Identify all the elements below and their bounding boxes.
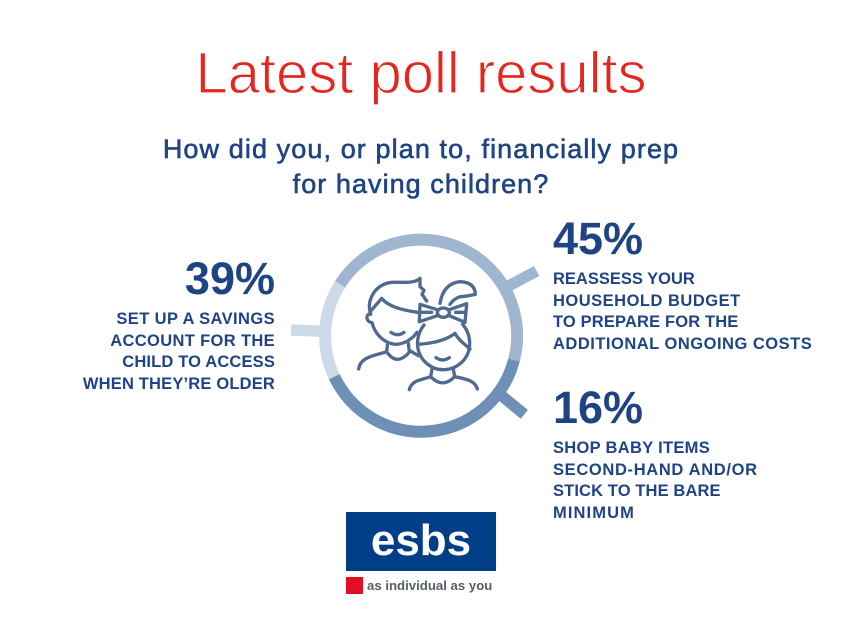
label 39%: SET UP A SAVINGS — [116, 310, 275, 328]
label 16%: STICK TO THE BARE — [553, 482, 721, 500]
label 16% — [553, 439, 758, 522]
ring segment 39% — [291, 284, 340, 377]
question heading: for having children? — [293, 169, 549, 199]
ring chart with children icon — [290, 234, 540, 438]
label 45%: HOUSEHOLD BUDGET — [553, 292, 741, 310]
ring segment 45% — [340, 240, 537, 360]
tagline: as individual as you — [367, 578, 492, 593]
title: Latest poll results — [195, 41, 647, 106]
value 39%: 39% — [185, 253, 275, 304]
icon: boy and girl — [359, 278, 477, 390]
label 16%: SECOND-HAND AND/OR — [553, 460, 758, 478]
red square — [346, 577, 363, 594]
logo: esbs — [346, 512, 496, 594]
stat: 16% — [553, 382, 758, 522]
label 16%: SHOP BABY ITEMS — [553, 439, 710, 457]
ring segment 16% — [334, 360, 524, 432]
stat: 45% — [553, 213, 812, 352]
label 39%: ACCOUNT FOR THE — [110, 332, 275, 350]
logo box — [346, 512, 496, 571]
value 45%: 45% — [553, 213, 643, 264]
label 45%: REASSESS YOUR — [553, 270, 695, 288]
label 45%: TO PREPARE FOR THE — [553, 313, 738, 331]
stat: 39% — [82, 253, 275, 392]
label 39%: WHEN THEY’RE OLDER — [83, 374, 275, 392]
value 16%: 16% — [553, 382, 643, 433]
label 45% — [553, 270, 812, 352]
label 16%: MINIMUM — [553, 504, 635, 522]
label 45%: ADDITIONAL ONGOING COSTS — [553, 334, 812, 352]
question heading: How did you, or plan to, financially prep — [163, 134, 679, 164]
label 39%: CHILD TO ACCESS — [122, 353, 275, 371]
label 39% — [82, 310, 275, 392]
logo box: esbs — [371, 516, 471, 565]
question heading — [163, 134, 679, 199]
